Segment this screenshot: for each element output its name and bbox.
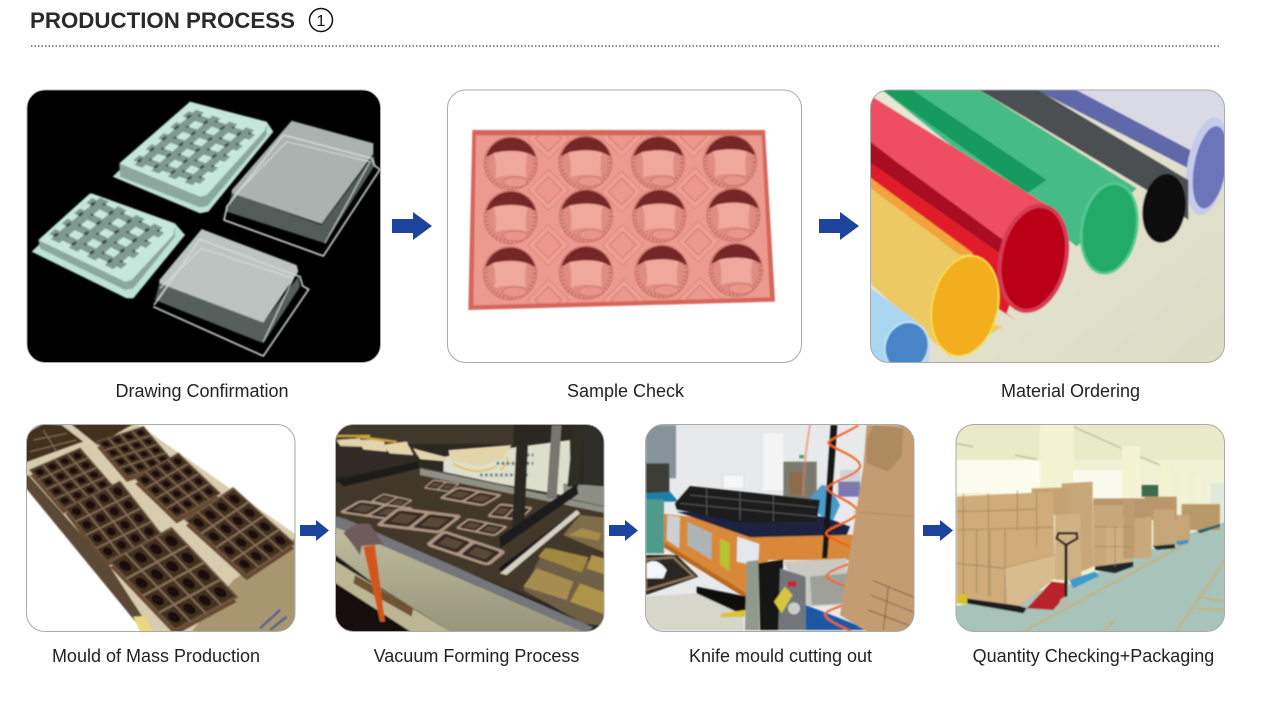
illustration: light blue roll <box>871 288 930 362</box>
illustration: factory background <box>646 425 860 502</box>
illustration: cardboard carton <box>840 425 917 633</box>
illustration: control unit <box>745 558 870 630</box>
illustration: upper tray <box>113 102 273 213</box>
arrow <box>923 520 953 541</box>
step number badge <box>310 8 332 32</box>
arrow <box>609 520 638 541</box>
illustration: pink tray <box>467 129 776 311</box>
illustration: work table <box>646 555 747 630</box>
illustration: warehouse hall <box>955 423 1226 522</box>
illustration: mould trays <box>23 423 294 635</box>
caption: Material Ordering <box>1001 381 1140 401</box>
illustration: mould base plate <box>23 423 297 633</box>
title: PRODUCTION PROCESS <box>30 8 295 33</box>
arrow <box>300 520 329 541</box>
illustration: black roll <box>977 88 1190 246</box>
illustration: worker <box>810 485 840 523</box>
panel: material ordering <box>870 90 1225 363</box>
illustration: middle carton stacks <box>1093 498 1145 573</box>
illustration: pole and air hose <box>822 425 860 633</box>
arrow <box>392 212 432 240</box>
illustration: golden trays <box>523 515 607 627</box>
illustration: yellow roll <box>867 175 1007 362</box>
caption: Drawing Confirmation <box>115 381 289 401</box>
caption: Mould of Mass Production <box>52 646 260 666</box>
caption: Vacuum Forming Process <box>374 646 579 666</box>
caption: Quantity Checking+Packaging <box>973 646 1214 666</box>
caption: Knife mould cutting out <box>689 646 872 666</box>
illustration: upper heater <box>333 423 513 467</box>
illustration: pallet truck <box>1027 533 1077 610</box>
panel: quantity checking and packaging <box>953 423 1227 633</box>
illustration: main carton stack <box>957 482 1099 613</box>
illustration: green roll <box>880 88 1144 278</box>
panel: drawing confirmation <box>27 90 381 363</box>
illustration: formed trays <box>338 479 533 566</box>
panel: knife mould cutting out <box>645 424 917 633</box>
illustration: cutting machine <box>646 486 853 598</box>
step number badge: 1 <box>317 13 326 30</box>
illustration: lower tray <box>32 193 185 298</box>
illustration: press frame <box>498 425 584 575</box>
illustration: far carton stacks <box>1133 497 1220 558</box>
caption: Sample Check <box>567 381 685 401</box>
illustration: upper lid <box>224 121 380 256</box>
panel: vacuum forming process <box>333 423 607 633</box>
illustration: lilac roll <box>1033 88 1236 218</box>
illustration: machine beam <box>333 517 593 633</box>
illustration: warehouse floor <box>953 522 1227 633</box>
illustration: forming table <box>336 462 604 602</box>
illustration: control panel background <box>333 425 607 510</box>
panel: mould of mass production <box>23 423 297 635</box>
illustration: red roll <box>867 93 1076 321</box>
arrow <box>819 212 859 240</box>
panel: sample check <box>448 90 802 362</box>
illustration: lower lid <box>153 229 309 356</box>
